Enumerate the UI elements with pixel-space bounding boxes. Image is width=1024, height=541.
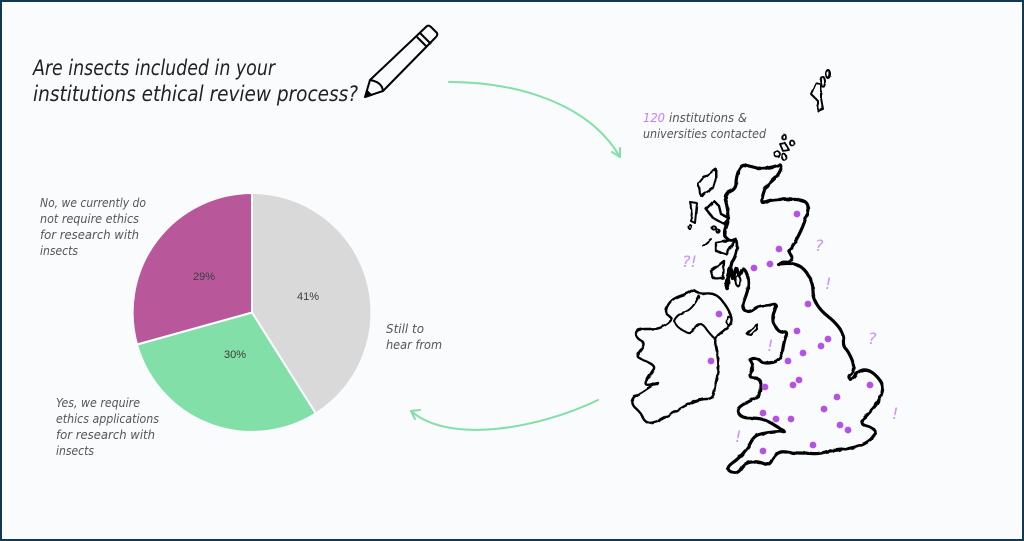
label: yes — [56, 395, 159, 458]
label: yes: ethics applications — [56, 411, 159, 426]
pie percentage labels: 29% — [193, 271, 215, 283]
map: question and exclamation marks: ? — [868, 329, 877, 348]
label: yes: Yes, we require — [56, 395, 140, 410]
label: no: for research with — [40, 227, 139, 242]
Northern Ireland border — [674, 296, 714, 338]
map: question and exclamation marks: ?! — [682, 252, 697, 271]
slice: still to hear from 41% — [252, 193, 371, 414]
label: no: insects — [40, 243, 78, 258]
map: question and exclamation marks: ! — [892, 404, 898, 423]
icon: pencil — [365, 26, 437, 97]
Orkney — [774, 134, 794, 160]
slice: no 29% — [133, 193, 252, 344]
Great Britain mainland — [724, 165, 883, 473]
label: still to hear from: Still to — [386, 321, 424, 336]
title: institutions ethical review process? — [33, 82, 358, 106]
title — [31, 56, 358, 106]
map: UK and Ireland outline — [632, 70, 883, 473]
Hebrides and western isles — [688, 169, 740, 286]
pie percentage labels — [193, 271, 319, 361]
callout: institutions contacted: institutions & — [669, 110, 747, 125]
label: no: not require ethics — [40, 211, 139, 226]
label: yes: insects — [56, 443, 94, 458]
arrow: title to map — [449, 82, 620, 157]
label: still to hear from: hear from — [386, 337, 442, 352]
callout: institutions contacted: universities contacted — [643, 126, 766, 141]
map: question and exclamation marks: ! — [825, 274, 831, 293]
map: question and exclamation marks: ? — [815, 236, 824, 255]
Ireland — [632, 290, 732, 423]
map: institution dots — [708, 211, 873, 454]
map: question and exclamation marks: ! — [735, 427, 741, 446]
label: yes: for research with — [56, 427, 155, 442]
title: Are insects included in your — [31, 56, 276, 80]
Isle of Man — [747, 324, 757, 335]
pie percentage labels: 30% — [224, 349, 246, 361]
arrow: map to pie — [411, 400, 598, 430]
pie chart — [133, 193, 371, 432]
callout: institutions contacted — [643, 110, 766, 141]
label: no — [40, 195, 146, 258]
map: question and exclamation marks: ! — [767, 336, 773, 355]
map: question and exclamation marks — [682, 236, 898, 446]
label: still to hear from — [386, 321, 442, 352]
callout: institutions contacted: 120 — [643, 110, 665, 125]
Shetland — [811, 70, 830, 111]
slice: yes 30% — [137, 312, 316, 432]
pie percentage labels: 41% — [297, 291, 319, 303]
label: no: No, we currently do — [40, 195, 146, 210]
Lough Neagh — [726, 317, 732, 325]
